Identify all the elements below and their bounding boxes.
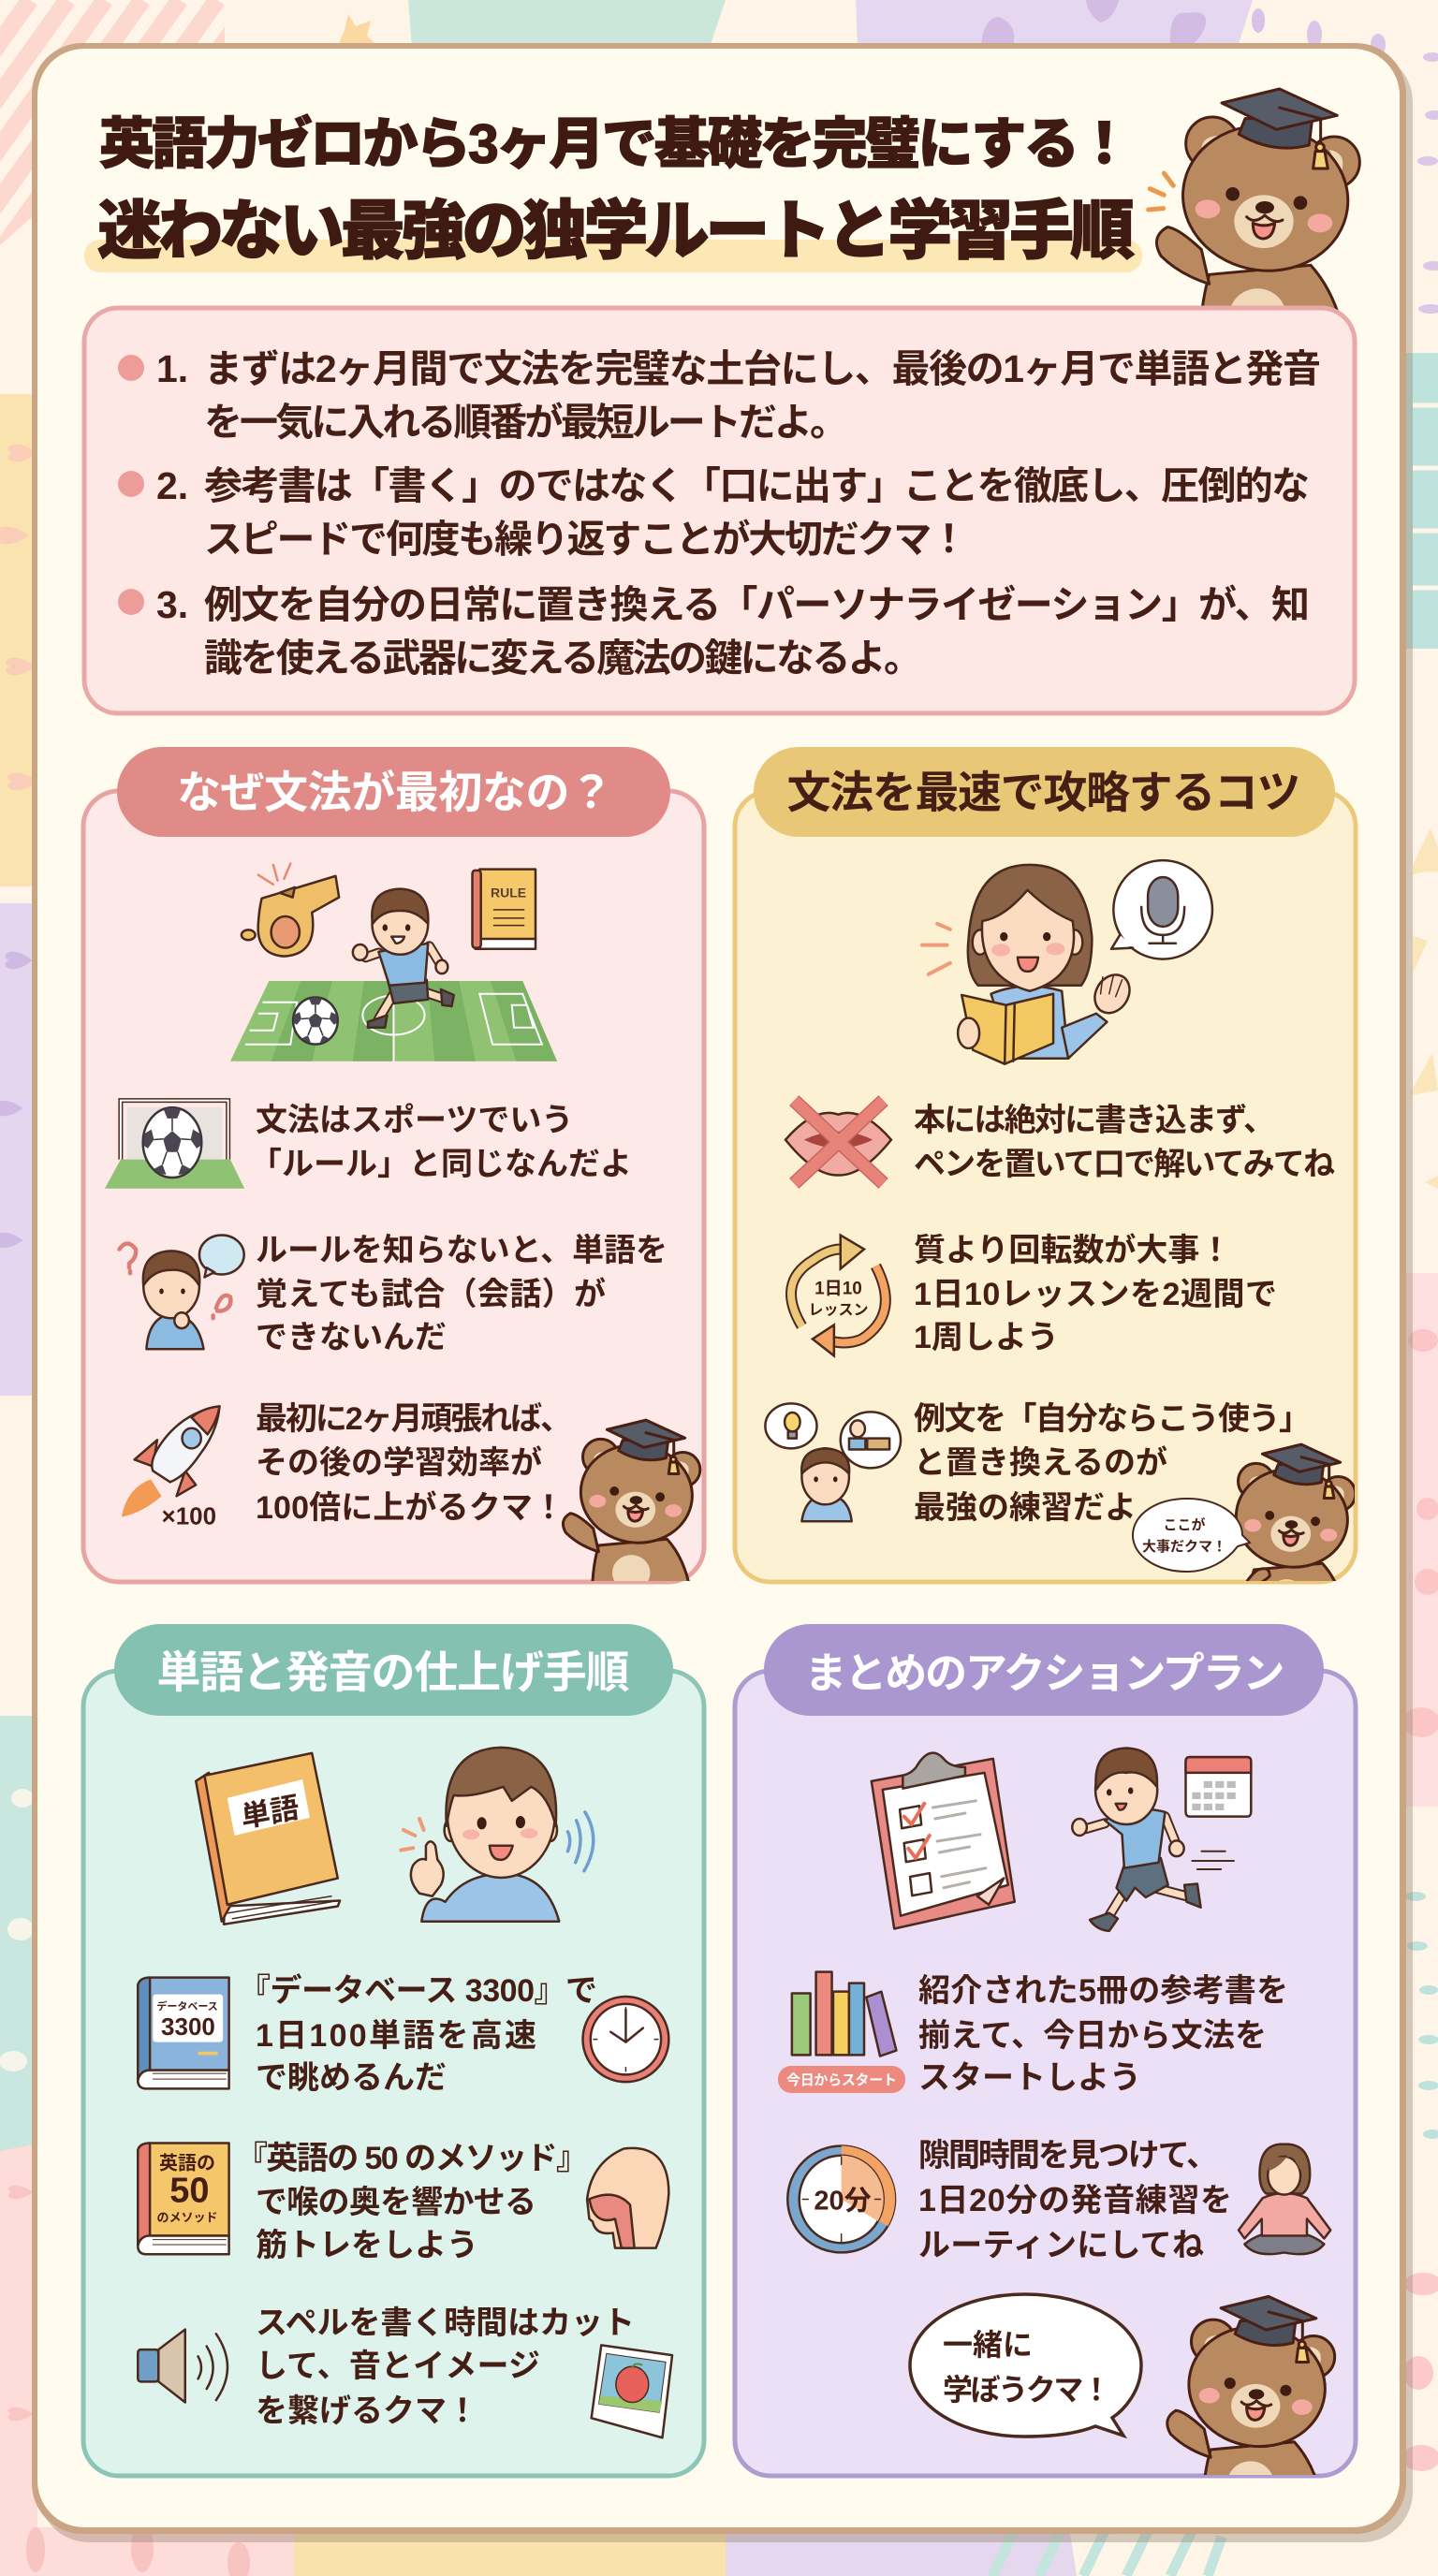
top star <box>339 14 374 43</box>
item 1: five books: 揃えて、今日から文法を <box>918 2018 1267 2054</box>
callout: important point: 大事だクマ！ <box>1142 1538 1226 1555</box>
icon: rule book <box>473 870 536 949</box>
panel: why grammar first <box>83 747 704 1604</box>
item 1: Database 3300: 『データベース 3300』で <box>239 1972 597 2009</box>
item 2: daily pronunciation <box>787 2138 1330 2263</box>
icon: 20 minute timer <box>787 2146 895 2252</box>
item 2: daily pronunciation: 1日20分の発音練習を <box>918 2183 1232 2218</box>
item 1: five books: スタートしよう <box>918 2060 1141 2096</box>
icon: meditating woman <box>1239 2144 1330 2254</box>
icon: checklist clipboard <box>872 1753 1015 1929</box>
title: 英語力ゼロから3ヶ月で基礎を完璧にする！ <box>99 113 1132 175</box>
left green block <box>0 1716 37 2151</box>
left purple block <box>0 903 37 1396</box>
item 1: do not write <box>785 1101 1335 1183</box>
right green block <box>1400 353 1438 649</box>
icon: 20 minute timer: 20分 <box>814 2185 872 2216</box>
summary point 2: 参考書は「書く」のではなく「口に出す」ことを徹底し、圧倒的な <box>204 464 1310 507</box>
icon: clock <box>583 1997 668 2082</box>
illustration: woman reading aloud <box>922 860 1212 1064</box>
item 2: 50 methods: で喉の奥を響かせる <box>256 2185 536 2220</box>
header bear mascot <box>1149 89 1359 362</box>
item 1: rules <box>105 1101 632 1189</box>
item 3: sound and image: スペルを書く時間はカット <box>256 2305 635 2341</box>
pink stripes <box>0 0 225 245</box>
summary point 2: 2. <box>156 464 188 507</box>
callout: important point <box>1133 1499 1250 1572</box>
heading pill: 文法を最速で攻略するコツ <box>786 768 1301 817</box>
item 3: personalize: 最強の練習だよ <box>914 1490 1137 1526</box>
summary point 1: まずは2ヶ月間で文法を完璧な土台にし、最後の1ヶ月で単語と発音 <box>204 347 1321 390</box>
item 2: 50 methods: 筋トレをしよう <box>256 2228 478 2263</box>
panel: action plan <box>735 1624 1356 2522</box>
icon: vocabulary book: 単語 <box>240 1791 301 1834</box>
icon: crossed lips <box>785 1101 891 1183</box>
illustration: running boy with calendar <box>1072 1748 1251 1931</box>
summary point 2 <box>118 464 1310 561</box>
icon: apple photo <box>592 2345 672 2437</box>
icon: orange book <box>138 2144 229 2254</box>
item 2: daily pronunciation: ルーティンにしてね <box>918 2228 1204 2263</box>
item 2: repetition: 1日10レッスンを2週間で <box>914 1277 1277 1312</box>
icon: person imagining <box>765 1403 901 1521</box>
icon: throat profile <box>587 2148 668 2248</box>
item 2: 50 methods <box>138 2141 668 2263</box>
icon: cycle arrows: 1日10 <box>814 1279 862 1298</box>
heading pill <box>114 1624 673 1716</box>
summary point 3 <box>118 583 1310 680</box>
item 2: without rules <box>120 1233 668 1355</box>
icon: orange book: のメソッド <box>157 2210 218 2224</box>
item 3: rocket efficiency: 最初に2ヶ月頑張れば、 <box>256 1401 572 1437</box>
icon: book stack <box>792 1972 896 2056</box>
summary point 1: 1. <box>156 347 188 390</box>
icon: blue book: 3300 <box>161 2012 215 2041</box>
summary point 3: 3. <box>156 583 188 626</box>
item 1: do not write: ペンを置いて口で解いてみてね <box>914 1147 1335 1182</box>
item 3: personalize: と置き換えるのが <box>914 1444 1167 1481</box>
icon: vocabulary book <box>196 1753 340 1925</box>
illustration: soccer field <box>230 981 557 1061</box>
bear mascot <box>563 1420 700 1604</box>
start today label: 今日からスタート <box>786 2071 897 2088</box>
bear mascot with thought <box>1234 1443 1355 1581</box>
item 1: five books: 紹介された5冊の参考書を <box>918 1973 1288 2009</box>
top green blob <box>408 0 726 47</box>
icon: rocket: ×100 <box>162 1501 216 1530</box>
item 2: without rules: できないんだ <box>256 1320 447 1355</box>
item 3: personalize <box>765 1401 1311 1526</box>
bear mascot waving <box>1166 2295 1337 2475</box>
item 1: do not write: 本には絶対に書き込まず、 <box>914 1103 1275 1138</box>
left yellow block <box>0 394 37 886</box>
illustration: boy speaking <box>401 1748 594 1922</box>
item 3: sound and image: を繋げるクマ！ <box>256 2393 478 2429</box>
bottom purple block <box>726 2527 1077 2576</box>
icon: cycle arrows <box>791 1236 886 1355</box>
title highlight <box>84 240 1142 272</box>
item 3: rocket efficiency: その後の学習効率が <box>256 1444 542 1481</box>
icon: blue book: データベース <box>156 1999 218 2012</box>
item 2: repetition: 1周しよう <box>914 1320 1059 1355</box>
item 3: personalize: 例文を「自分ならこう使う」 <box>914 1401 1311 1437</box>
item 1: rules: 「ルール」と同じなんだよ <box>250 1147 632 1182</box>
item 2: without rules: ルールを知らないと、単語を <box>256 1233 668 1268</box>
icon: goal and ball <box>105 1101 244 1189</box>
heading pill: なぜ文法が最初なの？ <box>177 768 613 817</box>
item 1: Database 3300: 1日100単語を高速 <box>256 2018 536 2054</box>
item 1: Database 3300 <box>138 1972 668 2096</box>
panel: fastest grammar tips <box>735 747 1356 1629</box>
item 2: without rules: 覚えても試合（会話）が <box>256 1276 606 1312</box>
top purple blob <box>856 0 1253 47</box>
bottom green stripes <box>992 2527 1222 2576</box>
item 2: daily pronunciation: 隙間時間を見つけて、 <box>918 2138 1218 2174</box>
heading pill <box>754 747 1335 837</box>
right yellow stars <box>1409 828 1438 1189</box>
icon: blue book <box>138 1978 229 2088</box>
right green dots <box>1405 1892 1438 2139</box>
item 2: 50 methods: 『英語の 50 のメソッド』 <box>236 2141 588 2176</box>
icon: cycle arrows: レッスン <box>808 1303 868 1319</box>
title <box>84 113 1142 272</box>
heading pill <box>117 747 670 837</box>
icon: whistle <box>242 864 339 957</box>
callout: let's learn together <box>910 2294 1141 2437</box>
icon: orange book: 英語の <box>159 2153 215 2174</box>
icon: rocket <box>122 1406 219 1530</box>
item 1: rules: 文法はスポーツでいう <box>256 1103 573 1138</box>
bottom yellow block <box>294 2527 726 2576</box>
illustration: running boy <box>353 889 454 1028</box>
icon: thinking boy <box>120 1236 244 1349</box>
item 2: repetition <box>791 1232 1277 1355</box>
summary point 1 <box>118 347 1321 444</box>
summary point 1: を一気に入れる順番が最短ルートだよ。 <box>204 401 848 444</box>
heading pill <box>764 1624 1324 1716</box>
panel: summary <box>84 308 1355 713</box>
item 3: rocket efficiency: 100倍に上がるクマ！ <box>256 1489 565 1526</box>
right pink hearts <box>1402 2273 1438 2471</box>
item 1: five books <box>778 1972 1288 2096</box>
item 3: sound and image <box>138 2305 672 2437</box>
callout: let's learn together: 一緒に <box>943 2328 1033 2362</box>
item 3: sound and image: して、音とイメージ <box>256 2349 540 2384</box>
icon: speaker <box>138 2330 227 2402</box>
summary point 3: 例文を自分の日常に置き換える「パーソナライゼーション」が、知 <box>204 583 1310 626</box>
item 1: Database 3300: で眺めるんだ <box>256 2060 447 2096</box>
icon: orange book: 50 <box>169 2171 209 2210</box>
left and bottom pink block <box>0 2144 294 2576</box>
right pink block <box>1400 1273 1438 1807</box>
summary point 3: 識を使える武器に変える魔法の鍵になるよ。 <box>204 637 922 680</box>
title: 迷わない最強の独学ルートと学習手順 <box>97 195 1135 267</box>
callout: important point: ここが <box>1163 1516 1206 1533</box>
start today label <box>778 2066 905 2093</box>
summary point 2: スピードで何度も繰り返すことが大切だクマ！ <box>204 518 968 561</box>
item 2: repetition: 質より回転数が大事！ <box>914 1232 1231 1268</box>
heading pill: 単語と発音の仕上げ手順 <box>157 1647 629 1697</box>
panel: vocabulary and pronunciation steps <box>83 1624 704 2476</box>
right purple dots <box>1417 52 1438 314</box>
icon: rule book: RULE <box>491 886 526 900</box>
item 3: rocket efficiency <box>122 1401 572 1530</box>
callout: let's learn together: 学ぼうクマ！ <box>943 2373 1111 2407</box>
heading pill: まとめのアクションプラン <box>805 1649 1284 1697</box>
